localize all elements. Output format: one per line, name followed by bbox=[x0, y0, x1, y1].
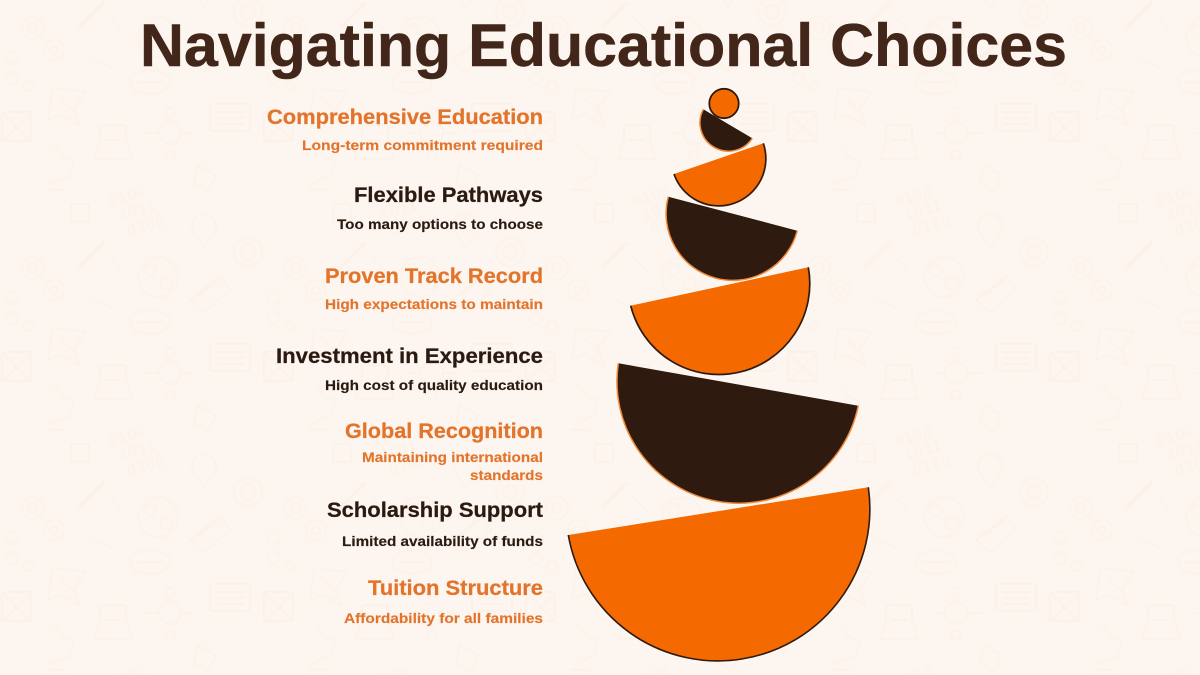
label: Flexible Pathways: Too many options to choose bbox=[337, 216, 543, 232]
label: Tuition Structure: Affordability for all families bbox=[344, 610, 543, 626]
label: Comprehensive Education: Comprehensive Education bbox=[267, 106, 543, 129]
balancing stack of semicircles bbox=[568, 89, 870, 661]
title: Navigating Educational Choices bbox=[140, 12, 1067, 79]
label: Investment in Experience bbox=[276, 345, 543, 393]
circle on top bbox=[709, 89, 739, 118]
label: Flexible Pathways bbox=[337, 184, 543, 232]
label: Global Recognition bbox=[345, 420, 543, 483]
label: Investment in Experience: High cost of quality education bbox=[325, 377, 543, 393]
label: Global Recognition: standards bbox=[470, 467, 543, 483]
label: Investment in Experience: Investment in Experience bbox=[276, 345, 543, 368]
semicircle 1: comprehensive education bbox=[700, 109, 752, 151]
label: Global Recognition: Maintaining international bbox=[362, 449, 543, 465]
label: Scholarship Support bbox=[327, 499, 543, 549]
label: Proven Track Record: High expectations to maintain bbox=[325, 296, 543, 312]
label: Proven Track Record bbox=[325, 265, 543, 312]
semicircle 3: proven track record bbox=[666, 197, 797, 280]
label: Scholarship Support: Limited availability of funds bbox=[342, 533, 543, 549]
semicircle 2: flexible pathways bbox=[674, 143, 766, 206]
label: Scholarship Support: Scholarship Support bbox=[327, 499, 543, 522]
label: Global Recognition: Global Recognition bbox=[345, 420, 543, 443]
label: Comprehensive Education: Long-term commitment required bbox=[302, 137, 543, 153]
semicircle 4: investment in experience bbox=[631, 267, 810, 375]
label: Tuition Structure: Tuition Structure bbox=[368, 577, 543, 600]
semicircle 6: tuition structure bbox=[568, 487, 870, 661]
semicircle 5: global recognition bbox=[617, 363, 858, 503]
label: Tuition Structure bbox=[344, 577, 543, 626]
label: Comprehensive Education bbox=[267, 106, 543, 153]
label: Proven Track Record: Proven Track Record bbox=[325, 265, 543, 288]
label: Flexible Pathways: Flexible Pathways bbox=[354, 184, 543, 207]
labels column bbox=[267, 106, 543, 626]
